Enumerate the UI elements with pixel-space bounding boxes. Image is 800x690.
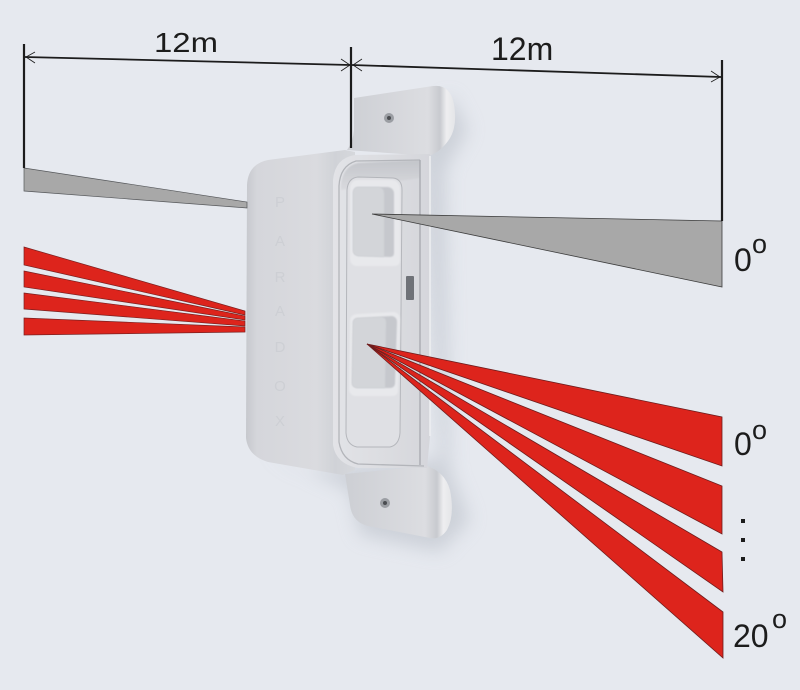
right rim highlight — [429, 156, 431, 436]
logo embossed on side: P — [275, 194, 285, 211]
lower mounting flange — [345, 466, 452, 538]
label: red beam angle 20 degrees: o — [772, 604, 787, 634]
dimension lines — [24, 44, 722, 221]
label: grey beam angle 0 degrees: o — [752, 229, 767, 259]
logo embossed on side — [274, 194, 286, 430]
label: red beam angle 0 degrees — [734, 415, 767, 462]
raised sensor face — [346, 177, 402, 447]
label: red beam angle 20 degrees: 20 — [733, 618, 769, 654]
right range: red beams — [367, 344, 723, 658]
label: grey beam angle 0 degrees: 0 — [734, 242, 752, 278]
right range: grey beam — [372, 214, 722, 287]
label: left 12m: 12m — [154, 27, 218, 58]
lower screw — [380, 498, 390, 508]
logo embossed on side: O — [274, 378, 286, 395]
logo embossed on side: A — [275, 303, 285, 320]
indicator slot — [406, 276, 414, 300]
label: grey beam angle 0 degrees — [734, 229, 767, 278]
left range: grey beam — [24, 168, 247, 208]
panel inner edge — [339, 160, 424, 466]
device: motion detector — [246, 86, 455, 538]
logo embossed on side: A — [275, 233, 285, 250]
label: right 12m: 12m — [491, 31, 553, 67]
logo embossed on side: D — [275, 339, 286, 356]
logo embossed on side: R — [275, 269, 286, 286]
left range: red beams — [24, 247, 245, 335]
label: red beam angle 20 degrees — [733, 604, 787, 654]
lower sensor window — [349, 312, 400, 396]
device shadow — [262, 95, 470, 552]
label: red beam angle 0 degrees: o — [752, 415, 767, 445]
panel top shadow band — [341, 160, 420, 190]
upper screw — [384, 113, 394, 123]
logo embossed on side: X — [275, 413, 285, 430]
front panel — [333, 154, 430, 468]
upper mounting flange — [347, 86, 455, 156]
upper sensor window — [350, 180, 400, 266]
housing side — [246, 150, 355, 475]
label: red beam angle 0 degrees: 0 — [734, 426, 752, 462]
label: ellipsis dots — [741, 519, 745, 561]
